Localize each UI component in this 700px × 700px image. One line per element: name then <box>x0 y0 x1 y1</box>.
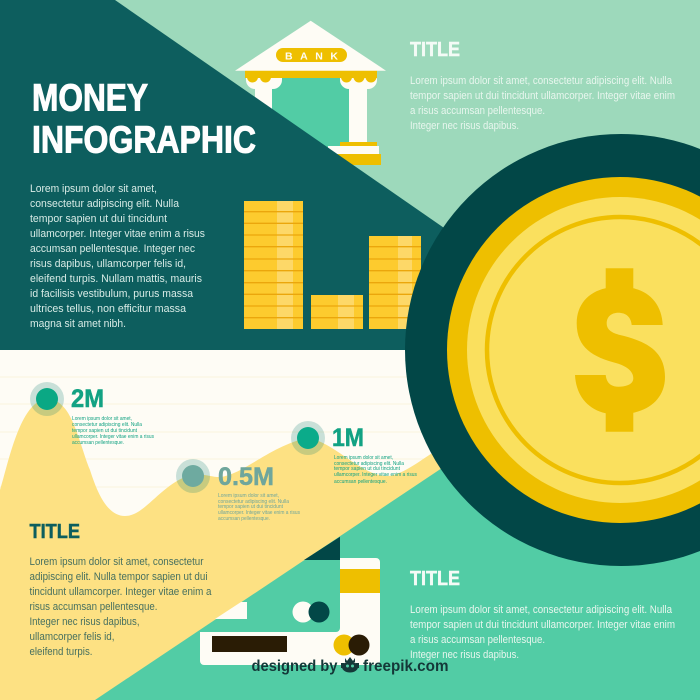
stat: 1M: 1M <box>332 424 364 452</box>
heading: bottom right title: TITLE <box>410 567 460 590</box>
text block: bottom left <box>30 556 212 658</box>
stat: 2M <box>30 382 154 446</box>
text block: bottom left: adipiscing elit. Nulla tempor sapien ut dui <box>30 571 208 583</box>
watermark: designed by freepik: designed by <box>252 658 338 675</box>
text block: bottom left: ullamcorper felis id, <box>30 631 114 643</box>
text block: top right: a risus accumsan pellentesque. <box>410 105 545 117</box>
text block: intro: Lorem ipsum dolor sit amet, <box>30 183 157 195</box>
text block: intro: ultrices tellus, non efficitur massa <box>30 303 187 315</box>
heading: bottom left title: TITLE <box>30 520 80 543</box>
stat: 0.5M: 0.5M <box>218 463 274 491</box>
text block: intro: eleifend turpis. Nullam mattis, mauris <box>30 273 202 285</box>
icon: bank building: BANK <box>285 50 338 62</box>
stat: 0.5M: tempor sapien ut dui tincidunt <box>218 504 284 510</box>
area chart: yellow curve <box>0 399 445 700</box>
heading: top right title: TITLE <box>410 38 460 61</box>
icon: big dollar coin <box>405 134 700 566</box>
text block: intro: magna sit amet nibh. <box>30 318 126 330</box>
stat: 2M: accumsan pellentesque. <box>72 440 124 446</box>
stat: 1M: Lorem ipsum dolor sit amet, <box>334 455 393 461</box>
stat: 0.5M: accumsan pellentesque. <box>218 516 270 522</box>
panel: bottom green section <box>95 466 700 700</box>
stat: 0.5M: Lorem ipsum dolor sit amet, <box>218 493 279 499</box>
stat: 2M: tempor sapien ut dui tincidunt <box>72 428 138 434</box>
stat: 1M: accumsan pellentesque. <box>334 479 387 485</box>
stat: 2M: 2M <box>71 385 104 413</box>
text block: intro: id facilisis vestibulum, purus massa <box>30 288 194 300</box>
text block: intro: consectetur adipiscing elit. Nulla <box>30 198 180 210</box>
stat: 1M <box>291 421 417 485</box>
text block: bottom left: risus accumsan pellentesque. <box>30 601 158 613</box>
stat: 2M: Lorem ipsum dolor sit amet, <box>72 416 132 422</box>
title <box>32 78 256 162</box>
stat: 1M: tempor sapien ut dui tincidunt <box>334 466 401 472</box>
text block: bottom right <box>410 604 675 661</box>
text block: intro: risus dapibus, ullamcorper felis id, <box>30 258 186 270</box>
chart: coin stacks <box>244 201 421 329</box>
text block: bottom left: tincidunt ullamcorper. Integer vitae enim a <box>30 586 212 598</box>
watermark: designed by freepik: freepik.com <box>363 658 448 675</box>
text block: intro: tempor sapien ut dui tincidunt <box>30 213 168 225</box>
text block: top right <box>410 75 675 132</box>
panel: dark teal title panel <box>0 0 460 350</box>
stat: 2M: consectetur adipiscing elit. Nulla <box>72 422 142 428</box>
title: MONEY <box>32 78 148 120</box>
title: INFOGRAPHIC <box>32 120 256 162</box>
stat: 0.5M: consectetur adipiscing elit. Nulla <box>218 499 289 505</box>
stat: 1M: ullamcorper. Integer vitae enim a risus <box>334 472 417 478</box>
text block: intro <box>30 183 205 330</box>
icon: bank building <box>235 21 386 165</box>
text block: bottom left: Lorem ipsum dolor sit amet, consectetur <box>30 556 204 568</box>
text block: bottom right: Integer nec risus dapibus. <box>410 649 519 661</box>
stat: 0.5M: ullamcorper. Integer vitae enim a risus <box>218 510 300 516</box>
icon: credit card <box>200 537 380 665</box>
text block: intro: accumsan pellentesque. Integer nec <box>30 243 195 255</box>
stat: 1M: consectetur adipiscing elit. Nulla <box>334 461 404 467</box>
panel: cream chart background <box>0 350 460 700</box>
watermark: designed by freepik <box>252 657 448 675</box>
text block: bottom left: eleifend turpis. <box>30 646 92 658</box>
text block: bottom right: a risus accumsan pellentesque. <box>410 634 545 646</box>
panel: top light green background <box>0 0 700 360</box>
text block: top right: Integer nec risus dapibus. <box>410 120 519 132</box>
text block: intro: ullamcorper. Integer vitae enim a risus <box>30 228 205 240</box>
stat: 0.5M <box>176 459 300 522</box>
text block: bottom left: Integer nec risus dapibus, <box>30 616 140 628</box>
stat: 2M: ullamcorper. Integer vitae enim a risus <box>72 434 154 440</box>
